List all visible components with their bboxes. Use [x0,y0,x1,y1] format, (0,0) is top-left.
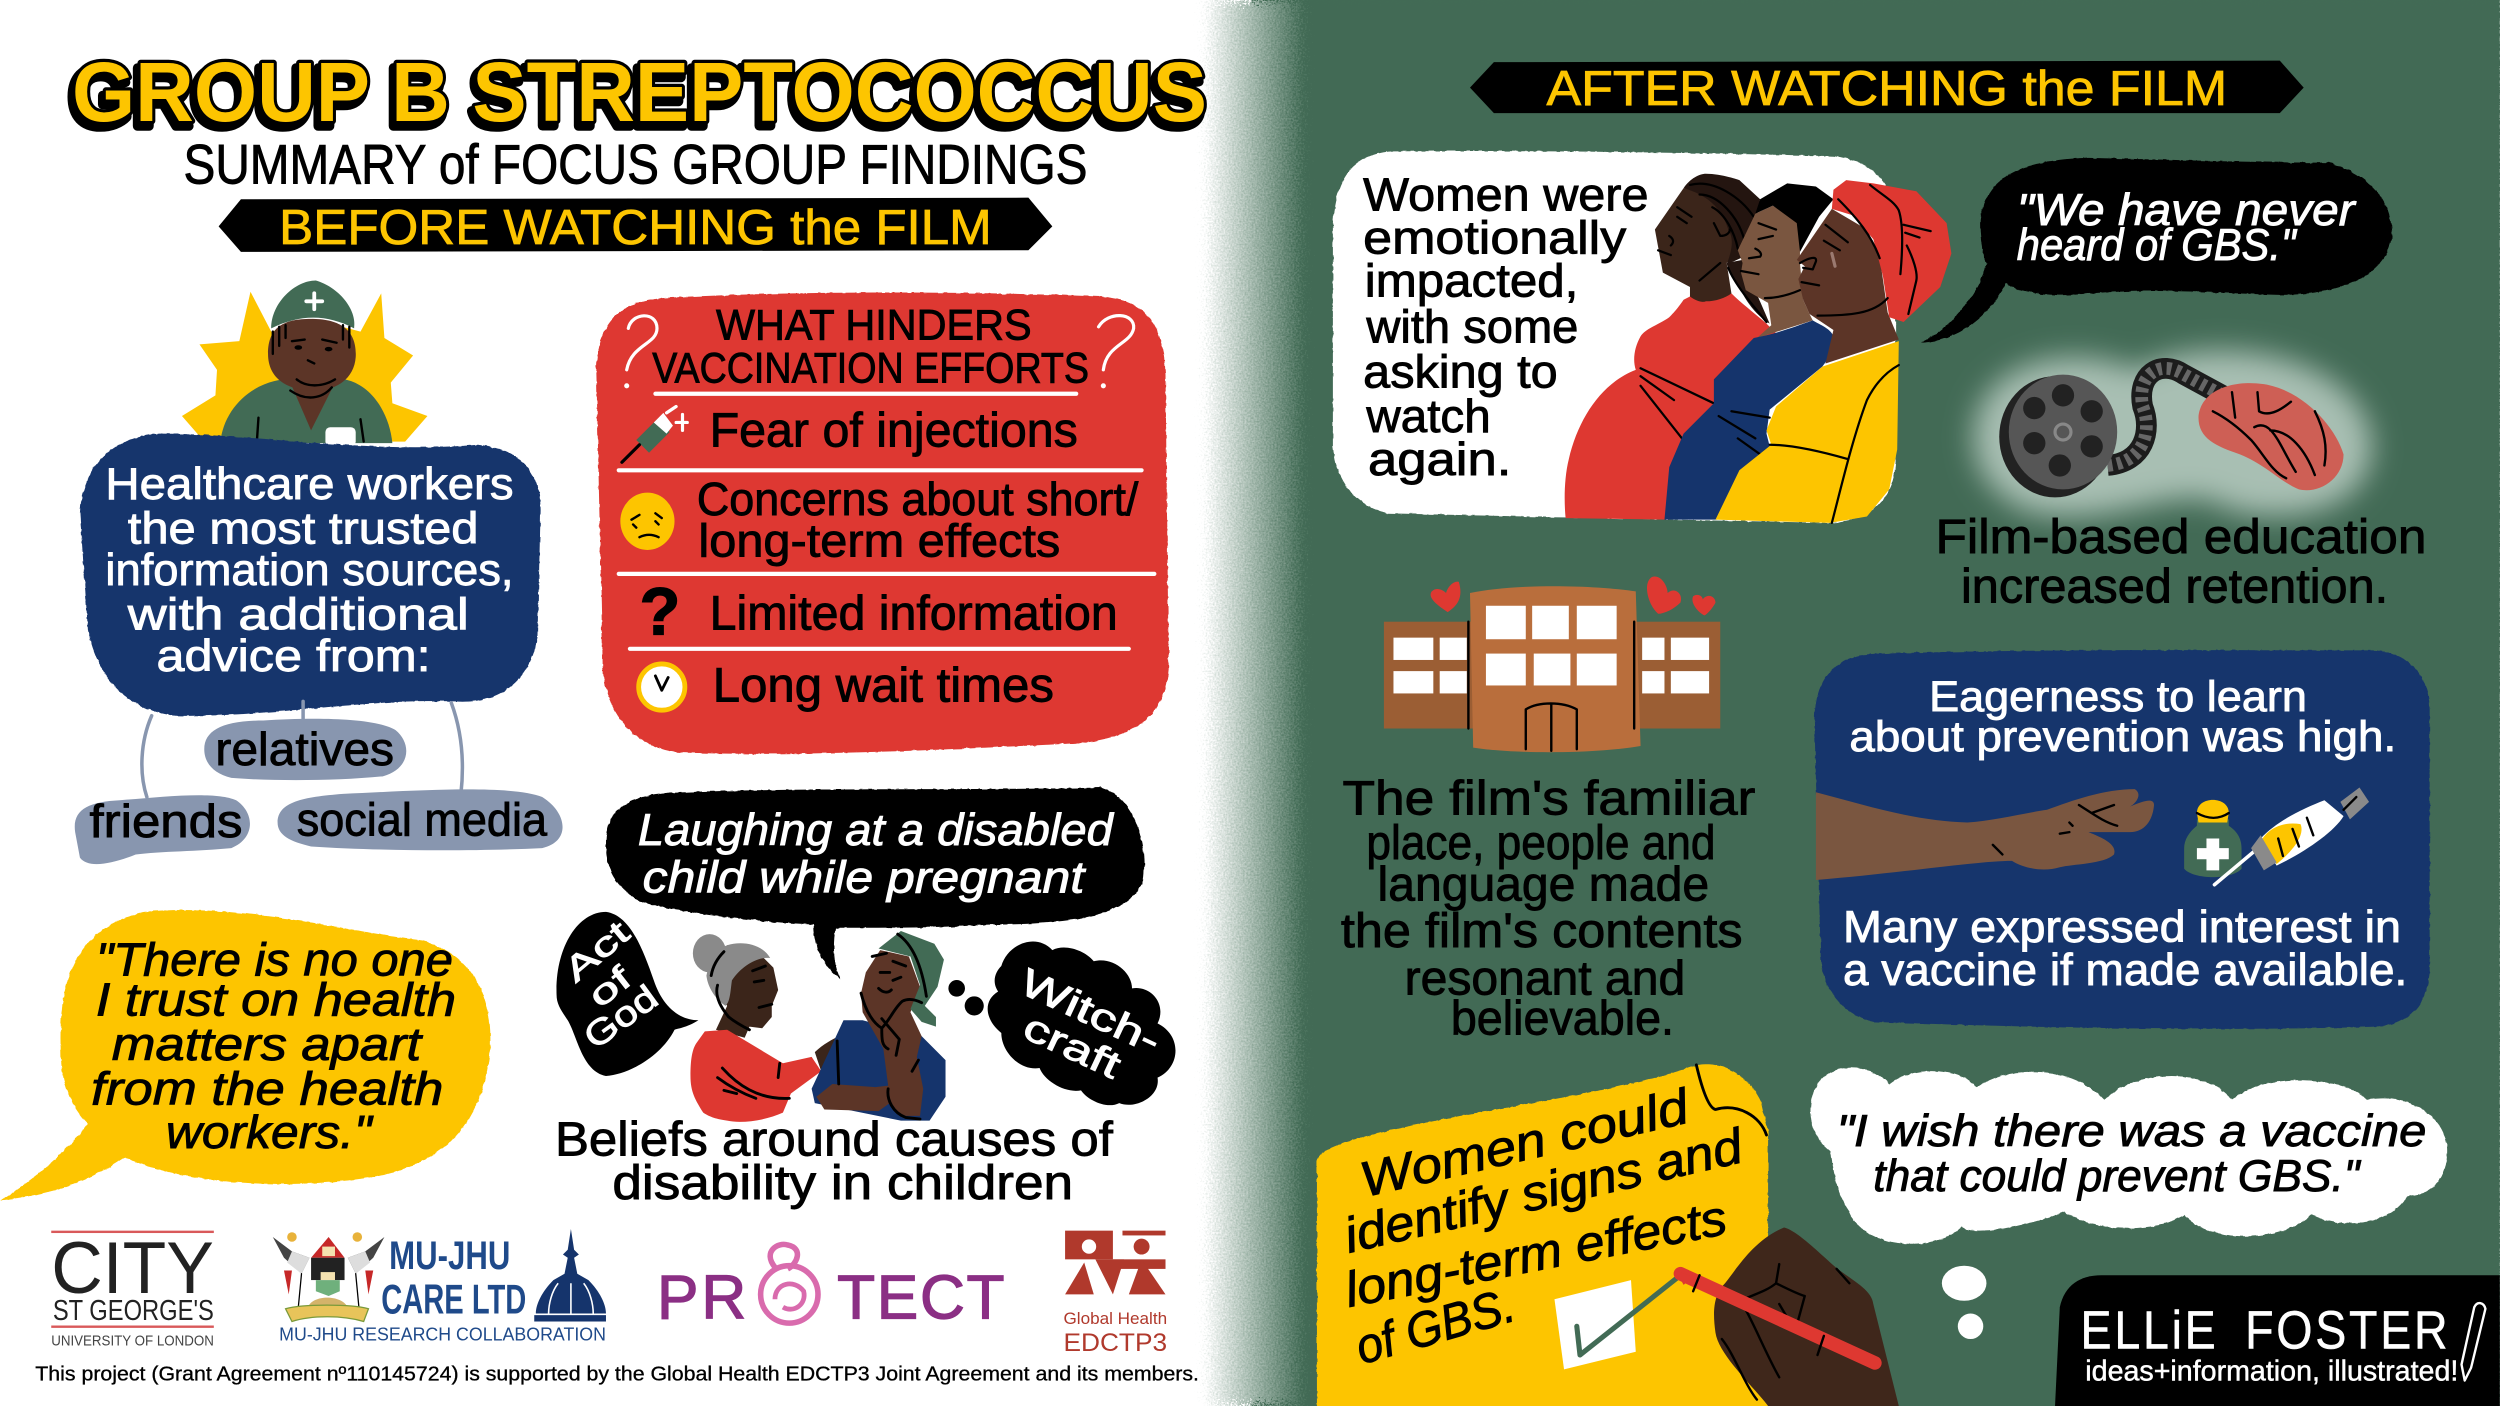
panel text: asking to [1363,345,1558,397]
illustration: hand holding red pen [1676,1227,1899,1406]
logo: City St George's [51,1227,214,1349]
film strip [2108,368,2222,465]
caption: beliefs around disability [555,1114,1114,1210]
act of god text: of [582,959,639,1015]
caption: film's familiar place: believable. [1451,993,1674,1046]
banner: after watching the film: AFTER WATCHING the FILM [1547,61,2227,116]
panel text: the most trusted [128,505,478,554]
caption: film-based education [1935,511,2426,614]
logo: City St George's: CITY [51,1227,214,1309]
panel text: with some [1365,301,1578,353]
witchcraft text: craft [1017,1005,1128,1088]
panel: what hinders vaccination efforts: Fear of injections [710,404,1078,457]
illustration: two women talking [690,931,946,1122]
caption: film's familiar place [1341,773,1755,1046]
logo: MU-JHU Care Ltd: MU-JHU RESEARCH COLLABORATION [279,1324,606,1345]
paper text: long-term effects [1340,1190,1731,1318]
footer: funding acknowledgement: This project (Grant Agreement nº110145724) is supported by the Global Health EDCTP3 Joint Agreement and its members. [35,1363,1199,1385]
connector lines to other sources [142,701,462,797]
icon: syringe [2214,787,2369,885]
woman 1 [1565,174,1778,520]
callout: patient quote in yellow bubble [0,910,490,1200]
panel text: again. [1368,433,1511,485]
panel text: Healthcare workers [105,460,514,509]
subtitle: SUMMARY of FOCUS GROUP FINDINGS [184,132,1087,195]
pill: relatives: relatives [215,723,394,775]
logo: PROTECT [657,1244,1005,1332]
panel: healthcare workers trusted sources [80,434,541,716]
brain [2198,383,2344,490]
pill: friends [75,795,250,864]
act of god text: God [577,978,665,1057]
icon: question marks [624,316,1134,388]
panel text: emotionally [1363,211,1627,263]
panel text [1363,168,1649,485]
quote text: "We have never [2017,186,2357,235]
crest [273,1232,384,1322]
quote text [91,934,456,1158]
quote text [2017,186,2357,270]
older woman [690,934,871,1122]
banner: before watching the film: BEFORE WATCHING the FILM [279,200,992,255]
icon: black question mark: ? [639,574,680,649]
act of god text: Act [557,914,638,990]
caption: beliefs around disability: Beliefs around causes of [555,1114,1114,1167]
caption: film's familiar place: place, people and [1366,817,1715,870]
speech bubble: laughing at a disabled child [606,787,1144,979]
act of god text [557,914,665,1057]
logo: MU-JHU Care Ltd: CARE LTD [381,1276,526,1323]
panel: eagerness to learn about prevention [1814,650,2430,1029]
logo: PROTECT: PR [657,1263,746,1332]
panel: what hinders vaccination efforts [596,293,1169,754]
caption: film-based education: increased retention. [1961,561,2388,614]
panel text: impacted, [1365,255,1578,307]
thought dots [1942,1266,1986,1339]
witchcraft text: Witch- [1013,961,1167,1063]
quote text: "I wish there was a vaccine [1837,1107,2426,1156]
panel text bottom: a vaccine if made available. [1843,946,2407,995]
icon: hospital building with hearts [1384,577,1720,752]
heading: WHAT HINDERS [716,302,1032,350]
logo: City St George's: UNIVERSITY OF LONDON [51,1332,214,1349]
quote text: workers." [166,1106,374,1158]
pill: friends: friends [89,795,243,847]
caption: film-based education: Film-based education [1935,511,2426,564]
icon: syringe [622,406,687,462]
illustration: arm reaching [1816,789,2154,880]
panel text top [1849,673,2396,761]
caption: beliefs around disability: disability in children [612,1157,1073,1210]
caption: film's familiar place: the film's contents [1341,905,1743,958]
paper text: of GBS. [1349,1277,1521,1375]
signature: Ellie Foster [2055,1275,2500,1406]
thought dots [948,980,984,1015]
icon: pencil [2462,1303,2485,1380]
younger woman [812,931,946,1121]
illustration: three pregnant women [1565,174,1951,523]
dome [534,1229,606,1322]
panel text: information sources, [105,546,514,595]
logo: Global Health EDCTP3: EDCTP3 [1063,1330,1167,1357]
panel text bottom: Many expressed interest in [1843,903,2401,952]
thought bubble: I wish there was a vaccine [1810,1068,2447,1244]
speech bubble: we have never heard of GBS [1921,158,2392,343]
reel [1999,376,2111,497]
panel text: advice from: [156,632,431,681]
caption: film's familiar place: resonant and [1405,953,1685,1006]
heading: VACCINATION EFFORTS [652,345,1089,393]
caption: film's familiar place: language made [1378,859,1709,912]
bubble text [638,806,1114,903]
concerns text [697,473,1139,566]
panel: women emotionally impacted [1333,151,1951,523]
quote text: matters apart [112,1018,424,1070]
signature: Ellie Foster: ideas+information, illustrated! [2085,1355,2458,1387]
panel text bottom [1843,903,2407,995]
quote text: heard of GBS." [2017,221,2298,270]
panel text: watch [1365,390,1491,442]
panel text [105,460,514,681]
glow [1974,351,2372,516]
hearts [1431,582,1460,612]
quote text: I trust on health [96,973,456,1025]
panel: what hinders vaccination efforts: Long wait times [713,659,1054,712]
heading [652,302,1089,393]
panel: women could identify signs (yellow paper) [1317,1064,1768,1406]
concerns text: Concerns about short/ [697,473,1139,525]
bubble text: Laughing at a disabled [638,806,1114,855]
panel text top: Eagerness to learn [1929,673,2307,721]
bubble text: child while pregnant [643,854,1086,903]
quote text: that could prevent GBS." [1873,1152,2362,1201]
title: GROUP B STREPTOCOCCUS [69,50,1204,144]
icon: film reel and brain [1974,351,2372,516]
icon: ticked check box [1554,1275,1680,1369]
quote text [1837,1107,2426,1201]
panel: what hinders vaccination efforts: Limited information [710,588,1118,641]
woman 2 [1664,183,1833,520]
concerns text: long-term effects [698,514,1060,566]
logo: Global Health EDCTP3: Global Health [1063,1309,1167,1328]
pill: social media: social media [297,793,547,845]
signature: Ellie Foster: ELLiE FOSTER [2081,1301,2450,1361]
panel text: with additional [127,591,469,640]
icon: vaccine vial [2184,800,2242,877]
logo: PROTECT: TECT [837,1263,1005,1332]
speech bubble: act of god [556,912,698,1076]
paper text: identify signs and [1339,1118,1749,1264]
panel text top: about prevention was high. [1849,713,2396,761]
logo: MU-JHU Care Ltd: MU-JHU [389,1234,510,1278]
caption: film's familiar place: The film's familiar [1342,773,1755,826]
thought bubble: witchcraft [988,941,1175,1105]
logo: City St George's: ST GEORGE'S [53,1295,214,1327]
icon: worried face [620,493,675,550]
paper text: Women could [1355,1079,1695,1208]
title: GROUP B STREPTOCOCCUS [72,45,1207,139]
icon: clock [639,664,685,710]
quote text: "There is no one [96,934,453,986]
logo: MU-JHU Care Ltd [273,1229,606,1345]
icon: healthcare worker with sunburst [182,281,427,446]
quote text: from the health [91,1063,443,1115]
logo: Global Health EDCTP3 [1063,1231,1167,1357]
panel text: Women were [1363,168,1649,220]
witchcraft text [1013,961,1167,1088]
woman 3 [1715,180,1951,523]
paper text [1339,1079,1749,1375]
